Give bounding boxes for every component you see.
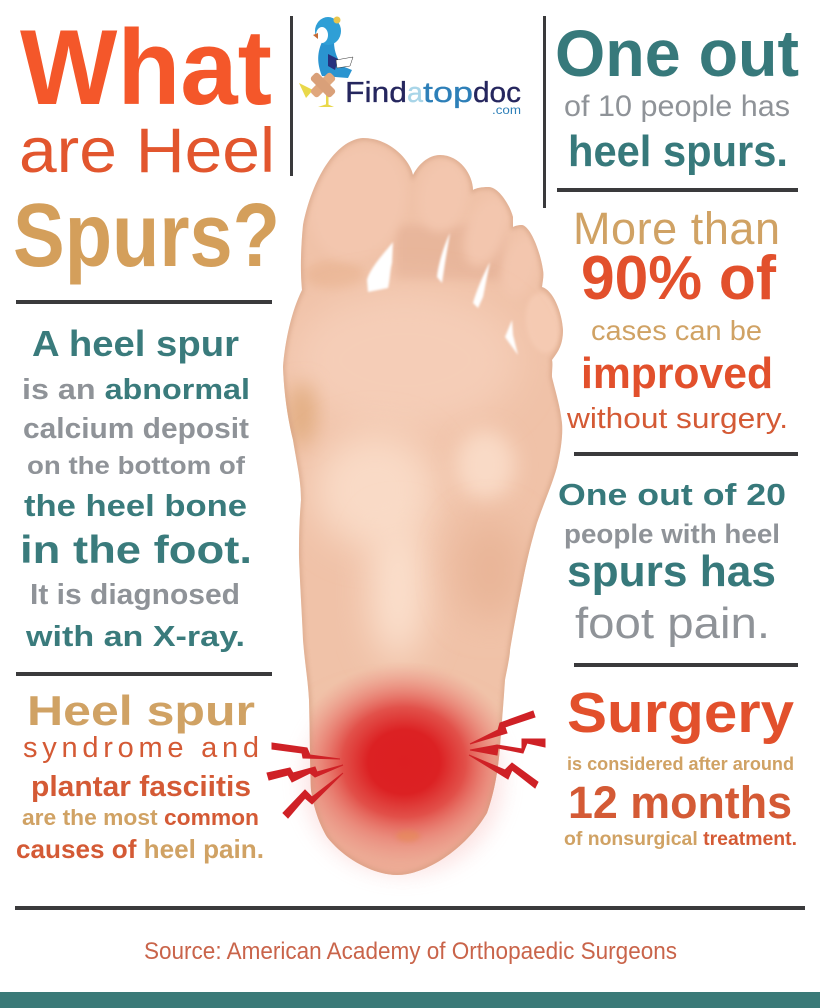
footer bar [0, 992, 820, 1008]
logo wordmark: a [407, 77, 424, 109]
logo wordmark: .com [492, 103, 521, 117]
stat: surgery: of nonsurgical treatment. [564, 829, 797, 850]
text block: what is a heel spur: on the bottom of [27, 452, 246, 480]
stat: one out of 20: One out of 20 [558, 477, 786, 512]
text block: causes of heel pain: are the most common [22, 805, 259, 830]
stat: surgery: 12 months [568, 777, 792, 828]
stat: 90 percent: More than [573, 203, 780, 254]
ball of foot [290, 290, 520, 430]
title [13, 7, 280, 286]
title: are Heel [19, 116, 275, 186]
text block: what is a heel spur: in the foot. [20, 529, 252, 572]
toe shading [398, 228, 500, 278]
left pain bolts [267, 743, 343, 818]
text block: causes of heel pain: Heel spur [27, 687, 255, 734]
foot illustration [267, 132, 564, 885]
logo: Findatopdoc [299, 16, 521, 117]
stat: 90 percent: cases can be [591, 315, 762, 346]
stat: one out of 20: spurs has [567, 547, 776, 596]
text block: causes of heel pain: syndrome and [23, 732, 259, 764]
title: What [20, 7, 272, 127]
heel tone [310, 737, 500, 875]
icon: duck mascot [299, 16, 353, 107]
stat: surgery: is considered after around [567, 754, 794, 774]
right pain bolts [469, 711, 545, 788]
stat: 90 percent: improved [581, 349, 773, 398]
stat: one out of 10: One out [555, 16, 799, 90]
stat: one out of 10 [555, 16, 799, 176]
text block: what is a heel spur: with an X-ray. [25, 621, 245, 653]
logo wordmark: Find [345, 77, 407, 109]
text block: what is a heel spur [20, 323, 252, 653]
gaps between toes [367, 233, 518, 355]
stat: 90 percent [566, 203, 788, 435]
text block: what is a heel spur: A heel spur [32, 323, 239, 364]
toes [294, 132, 422, 274]
text block: what is a heel spur: calcium deposit [23, 413, 249, 445]
edge shading [283, 138, 563, 875]
stat: 90 percent: without surgery. [566, 403, 788, 435]
logo wordmark [345, 77, 521, 117]
stat: one out of 20: people with heel [564, 519, 780, 549]
text block: causes of heel pain [16, 687, 264, 864]
stat: one out of 10: of 10 people has [564, 90, 790, 123]
text block: what is a heel spur: It is diagnosed [30, 579, 240, 611]
stat: surgery: Surgery [567, 681, 794, 745]
arch highlights [313, 432, 437, 548]
foot silhouette [283, 138, 563, 875]
text block: what is a heel spur: the heel bone [24, 488, 247, 523]
stat: surgery [564, 681, 797, 850]
text block: causes of heel pain: plantar fasciitis [31, 771, 251, 803]
logo wordmark: top [423, 77, 473, 109]
stat: one out of 20: foot pain. [575, 599, 770, 648]
source: Source: American Academy of Orthopaedic Surgeons [144, 938, 677, 965]
text block: what is a heel spur: is an abnormal [22, 374, 250, 406]
stat: one out of 20 [558, 477, 786, 648]
stat: 90 percent: 90% of [581, 244, 776, 313]
title: Spurs? [13, 186, 280, 286]
logo wordmark: doc [473, 77, 521, 109]
stat: one out of 10: heel spurs. [568, 127, 788, 176]
heel glow [303, 685, 503, 875]
text block: causes of heel pain: causes of heel pain. [16, 834, 264, 864]
red pain area [310, 668, 500, 852]
